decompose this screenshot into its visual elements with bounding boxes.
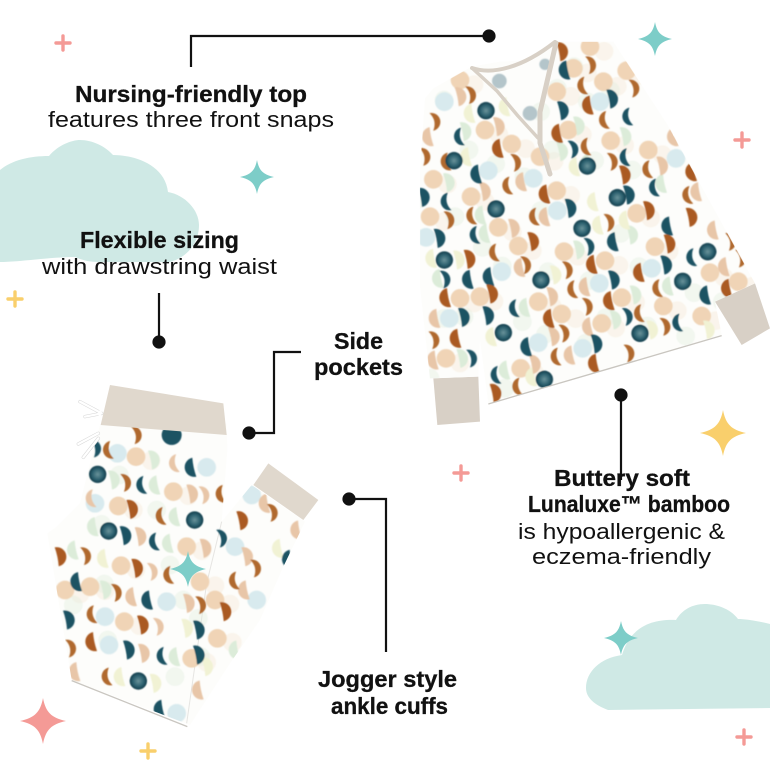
sparkle: teal on cloud [604,621,638,655]
text: buttery soft bamboo: eczema-friendly [532,544,711,569]
cloud: upper left [0,140,199,262]
text: buttery soft bamboo [518,465,730,569]
callout connector: bamboo [616,390,626,480]
collar and placket band [472,42,556,174]
sparkle: coral bottom left [20,698,66,744]
text: buttery soft bamboo: Buttery soft [554,465,690,491]
text: jogger style: ankle cuffs [331,693,448,719]
callout connector: drawstring [154,293,164,348]
ankle cuff [253,463,318,520]
cloud: lower right [586,604,770,710]
plus: coral center [454,466,468,480]
plus: yellow bottom [141,744,155,758]
callout connector: joggers [344,494,386,652]
waistband [101,385,227,435]
product: jogger pants [39,385,318,727]
sparkle: teal top right [638,22,672,56]
plus: coral bottom right [737,730,751,744]
text: nursing-friendly top: Nursing-friendly top [75,81,307,107]
text: jogger style [318,666,457,719]
sparkle: yellow right [700,410,746,456]
text: side pockets [314,328,403,380]
callout connector: nursing top [191,30,494,67]
text: flexible sizing: with drawstring waist [41,254,277,279]
text: flexible sizing [41,227,277,279]
sparkle: teal on pants [170,551,206,587]
drawstring [78,393,104,457]
callout connector: side pockets [244,352,301,438]
text: jogger style: Jogger style [318,666,457,692]
text: flexible sizing: Flexible sizing [80,227,239,253]
text: side pockets: Side [334,328,383,354]
text: buttery soft bamboo: Lunaluxe™ bamboo [528,491,730,517]
sparkle: teal left [240,160,274,194]
text: side pockets: pockets [314,354,403,380]
text: buttery soft bamboo: is hypoallergenic & [518,519,725,544]
text: nursing-friendly top: features three front snaps [48,107,334,132]
text: nursing-friendly top [48,81,334,132]
plus: coral top left [56,36,70,50]
plus: coral top right [735,133,749,147]
plus: yellow left [8,292,22,306]
product: nursing pajama top [405,37,770,425]
